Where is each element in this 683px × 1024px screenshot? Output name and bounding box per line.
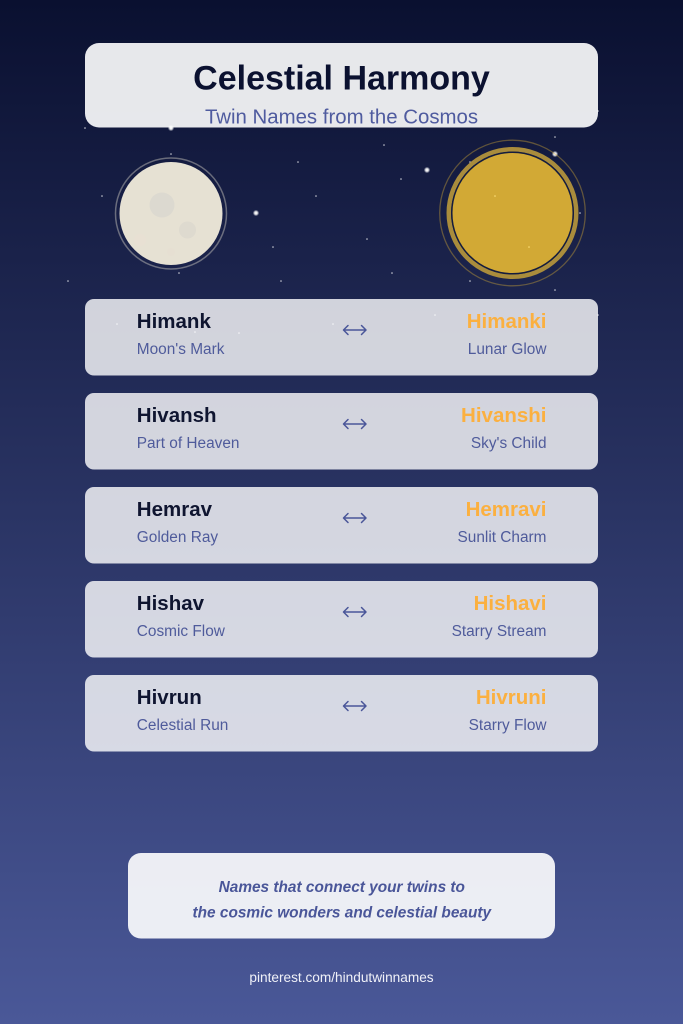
arrow [344,514,366,522]
name row: Hivrun and Hivruni [85,675,598,752]
boy meaning: Moon's Mark [137,341,225,358]
boy name: Hivansh [137,404,217,427]
girl name: Hishavi [474,592,546,615]
girl name: Hivanshi [461,404,546,427]
girl meaning: Lunar Glow [468,341,547,358]
girl name: Himanki [467,310,546,333]
boy name: Hemrav [137,498,213,521]
girl meaning: Starry Flow [469,717,547,734]
boy meaning: Cosmic Flow [137,623,226,640]
girl name: Hivruni [476,686,546,709]
girl meaning: Sunlit Charm [458,529,546,546]
footer link: pinterest.com/hindutwinnames [249,970,434,985]
boy meaning: Golden Ray [137,529,218,546]
arrow [344,420,366,428]
name row: Himank and Himanki [85,299,598,376]
boy name: Himank [137,310,211,333]
name row: Hemrav and Hemravi [85,487,598,564]
title: Celestial Harmony [193,60,490,98]
girl name: Hemravi [466,498,546,521]
boy name: Hishav [137,592,205,615]
title panel [85,43,598,128]
closing message line 1: Names that connect your twins to [219,879,465,896]
boy name: Hivrun [137,686,202,709]
girl meaning: Sky's Child [471,435,546,452]
star field [67,110,599,334]
girl meaning: Starry Stream [452,623,546,640]
closing message line 2: the cosmic wonders and celestial beauty [193,904,492,922]
arrow [344,326,366,334]
name row: Hishav and Hishavi [85,581,598,658]
boy meaning: Celestial Run [137,717,228,734]
arrow [344,608,366,616]
subtitle: Twin Names from the Cosmos [205,106,478,128]
closing message panel [128,853,555,938]
name row: Hivansh and Hivanshi [85,393,598,470]
icon: moon [116,158,226,269]
icon: sun [440,140,585,286]
boy meaning: Part of Heaven [137,435,239,452]
arrow [344,702,366,710]
